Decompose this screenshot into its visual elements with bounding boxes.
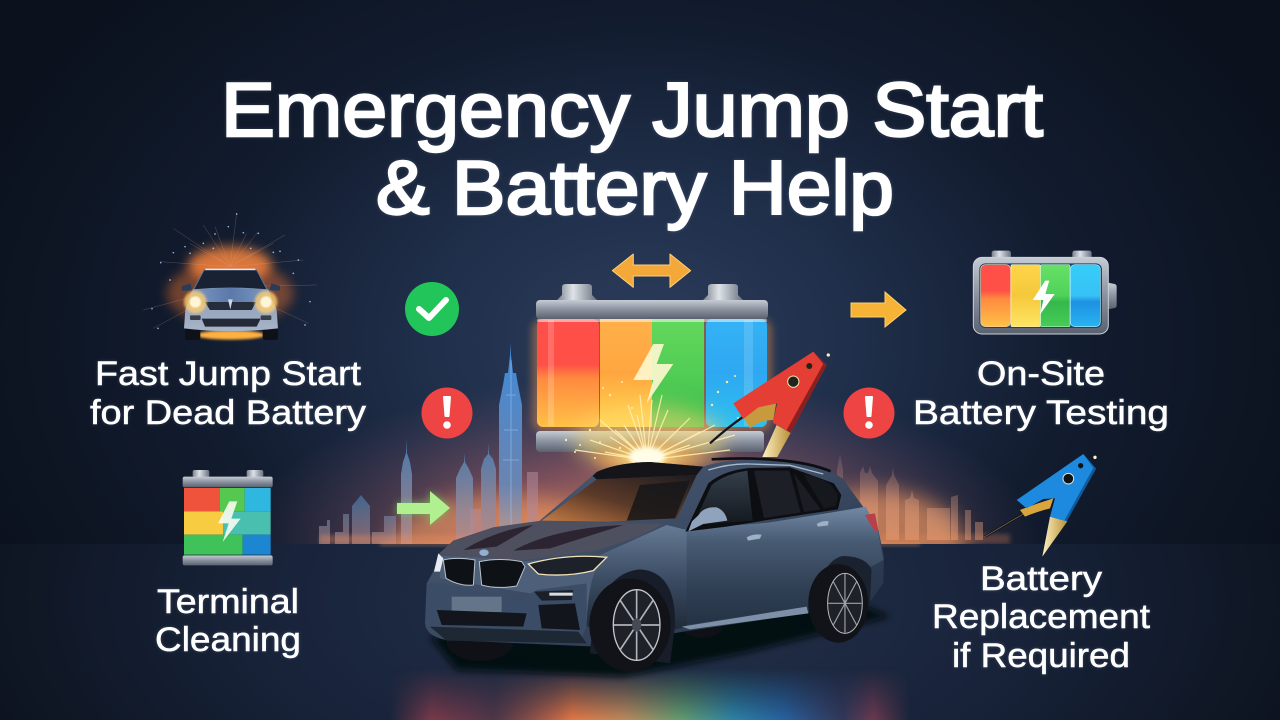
label: fast jump start: for Dead Battery [90,394,366,432]
hood shading [439,521,663,561]
lower bumper [426,583,587,643]
label: battery replacement [932,560,1151,675]
main battery graphic [532,284,772,452]
side mirror [688,507,727,531]
background [98,0,1183,544]
under-car glow [196,330,266,340]
floor [0,542,1280,720]
arrow: orange double arrow [612,254,691,287]
grille [443,549,525,587]
label: battery replacement: Replacement [932,598,1151,636]
ground shadow [430,597,890,677]
door panel [677,507,883,625]
battery cells [537,319,767,427]
title: & Battery Help [376,146,894,231]
icon: terminal cleaning battery [183,470,273,565]
front face [439,555,607,623]
battery base [536,431,764,452]
city skyline [319,343,1010,544]
battery terminals [557,284,743,300]
arrow: gold right arrow [851,292,906,327]
sparks [565,375,739,480]
front fender [583,525,687,630]
wheel arch and front wheel [589,569,675,672]
label: on-site battery testing: On-Site [977,355,1105,393]
side windows [685,458,841,532]
label: terminal cleaning: Cleaning [155,621,301,659]
title: Emergency Jump Start [221,68,1043,153]
battery lid [536,300,768,319]
label: terminal cleaning [155,583,301,659]
icon: red alert badge right [844,388,894,438]
arrow: green right arrow [397,491,450,525]
side sill and tail light [682,513,878,629]
rear wheel [808,556,872,643]
headlight [528,556,607,575]
windshield [542,475,697,522]
rear and far wheels [447,619,722,661]
icon: green check badge [405,282,459,336]
label: fast jump start: Fast Jump Start [95,355,362,393]
icon: car with headlight burst [143,213,317,340]
headlights [184,291,277,313]
burst rays [143,213,317,328]
title [221,68,1043,231]
car body [182,269,280,340]
label: terminal cleaning: Terminal [157,583,299,621]
car body shell [425,460,884,647]
label: battery replacement: if Required [952,637,1130,675]
icon: lightning bolt [633,344,673,403]
label: on-site battery testing: Battery Testing [913,394,1169,432]
icon: red alert badge left [422,388,472,438]
icon: full-colour battery, on-site testing [973,251,1117,334]
SUV car [425,458,890,677]
red jumper clamp [710,352,830,457]
label: battery replacement: Battery [980,560,1102,598]
label: on-site battery testing [913,355,1169,432]
label: fast jump start [90,355,366,432]
icon: blue jumper clamp [985,454,1097,557]
